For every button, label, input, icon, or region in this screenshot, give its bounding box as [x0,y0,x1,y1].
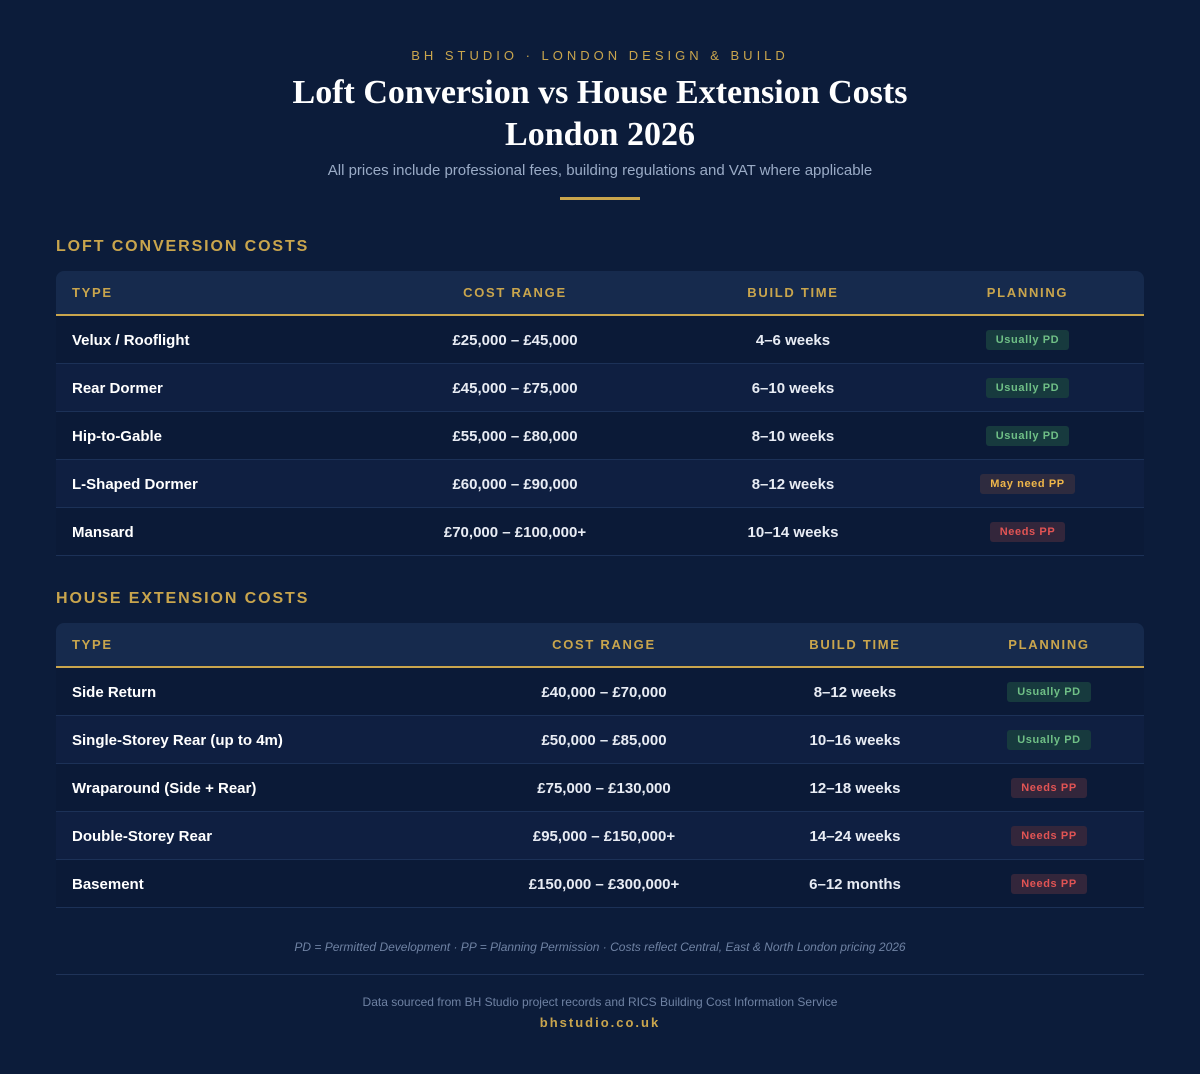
footer [363,995,837,1030]
table: extension: Basement [72,876,144,892]
footnote: PD = Permitted Development · PP = Planning Permission · Costs reflect Central, East & North London pricing 2026 [294,940,906,954]
table: extension: Side Return [72,684,156,701]
table: extension: Needs PP [1021,878,1077,890]
table: extension: Wraparound (Side + Rear) [72,780,256,796]
table: loft: £55,000 – £80,000 [452,428,578,444]
table: loft: 8–12 weeks [752,476,834,492]
table: extension: COST RANGE [552,637,656,652]
table: loft: PLANNING [987,285,1068,300]
title [293,74,907,153]
table: extension: Single-Storey Rear (up to 4m) [72,732,283,748]
table: extension: £50,000 – £85,000 [541,732,667,748]
subtitle: All prices include professional fees, building regulations and VAT where applicable [328,162,872,179]
table: loft: 6–10 weeks [752,380,834,396]
table: loft: Rear Dormer [72,380,163,396]
heading: extension: HOUSE EXTENSION COSTS [56,590,309,607]
heading: loft: LOFT CONVERSION COSTS [56,238,309,255]
table: loft: L-Shaped Dormer [72,476,198,492]
table: loft: 4–6 weeks [756,332,830,349]
table: extension: 10–16 weeks [810,732,900,748]
table: loft: Velux / Rooflight [72,332,190,349]
table: extension: Usually PD [1017,686,1081,698]
kicker: BH STUDIO · LONDON DESIGN & BUILD [411,48,789,63]
table: loft: Hip-to-Gable [72,428,162,444]
site: bhstudio.co.uk [540,1015,660,1030]
table: loft: TYPE [72,285,113,300]
table: loft: BUILD TIME [747,285,839,300]
table: loft: May need PP [990,478,1065,490]
header [293,48,907,200]
divider [560,197,640,200]
title: London 2026 [505,116,695,153]
table: loft: £45,000 – £75,000 [452,380,578,396]
source: Data sourced from BH Studio project records and RICS Building Cost Information Service [363,995,837,1009]
table: extension: £75,000 – £130,000 [537,780,671,796]
table: loft: Mansard [72,524,134,540]
table: extension: Double-Storey Rear [72,828,212,844]
table: extension: £95,000 – £150,000+ [533,828,675,844]
title: Loft Conversion vs House Extension Costs [293,74,907,111]
table: extension: Needs PP [1021,830,1077,842]
table: loft: £70,000 – £100,000+ [444,524,586,540]
table: loft: £25,000 – £45,000 [452,332,578,349]
table: loft: COST RANGE [463,285,567,300]
table: extension: BUILD TIME [809,637,901,652]
table: extension: £150,000 – £300,000+ [529,876,679,892]
table: loft: £60,000 – £90,000 [452,476,578,492]
table: extension: Usually PD [1017,734,1081,746]
table: extension: Needs PP [1021,782,1077,794]
table: loft: 10–14 weeks [748,524,838,540]
table: loft: Usually PD [996,334,1059,346]
table: loft [56,271,1144,556]
table: loft: Needs PP [1000,526,1055,538]
table: extension: 14–24 weeks [810,828,900,844]
table: extension: £40,000 – £70,000 [541,684,667,701]
table: loft: Usually PD [996,430,1059,442]
table: extension: PLANNING [1008,637,1090,652]
table: loft: Usually PD [996,382,1059,394]
table: extension: 8–12 weeks [814,684,896,701]
table: loft: 8–10 weeks [752,428,834,444]
table: extension: 12–18 weeks [810,780,900,796]
table: extension: TYPE [72,637,113,652]
table: extension [56,623,1144,908]
table: extension: 6–12 months [809,876,901,892]
